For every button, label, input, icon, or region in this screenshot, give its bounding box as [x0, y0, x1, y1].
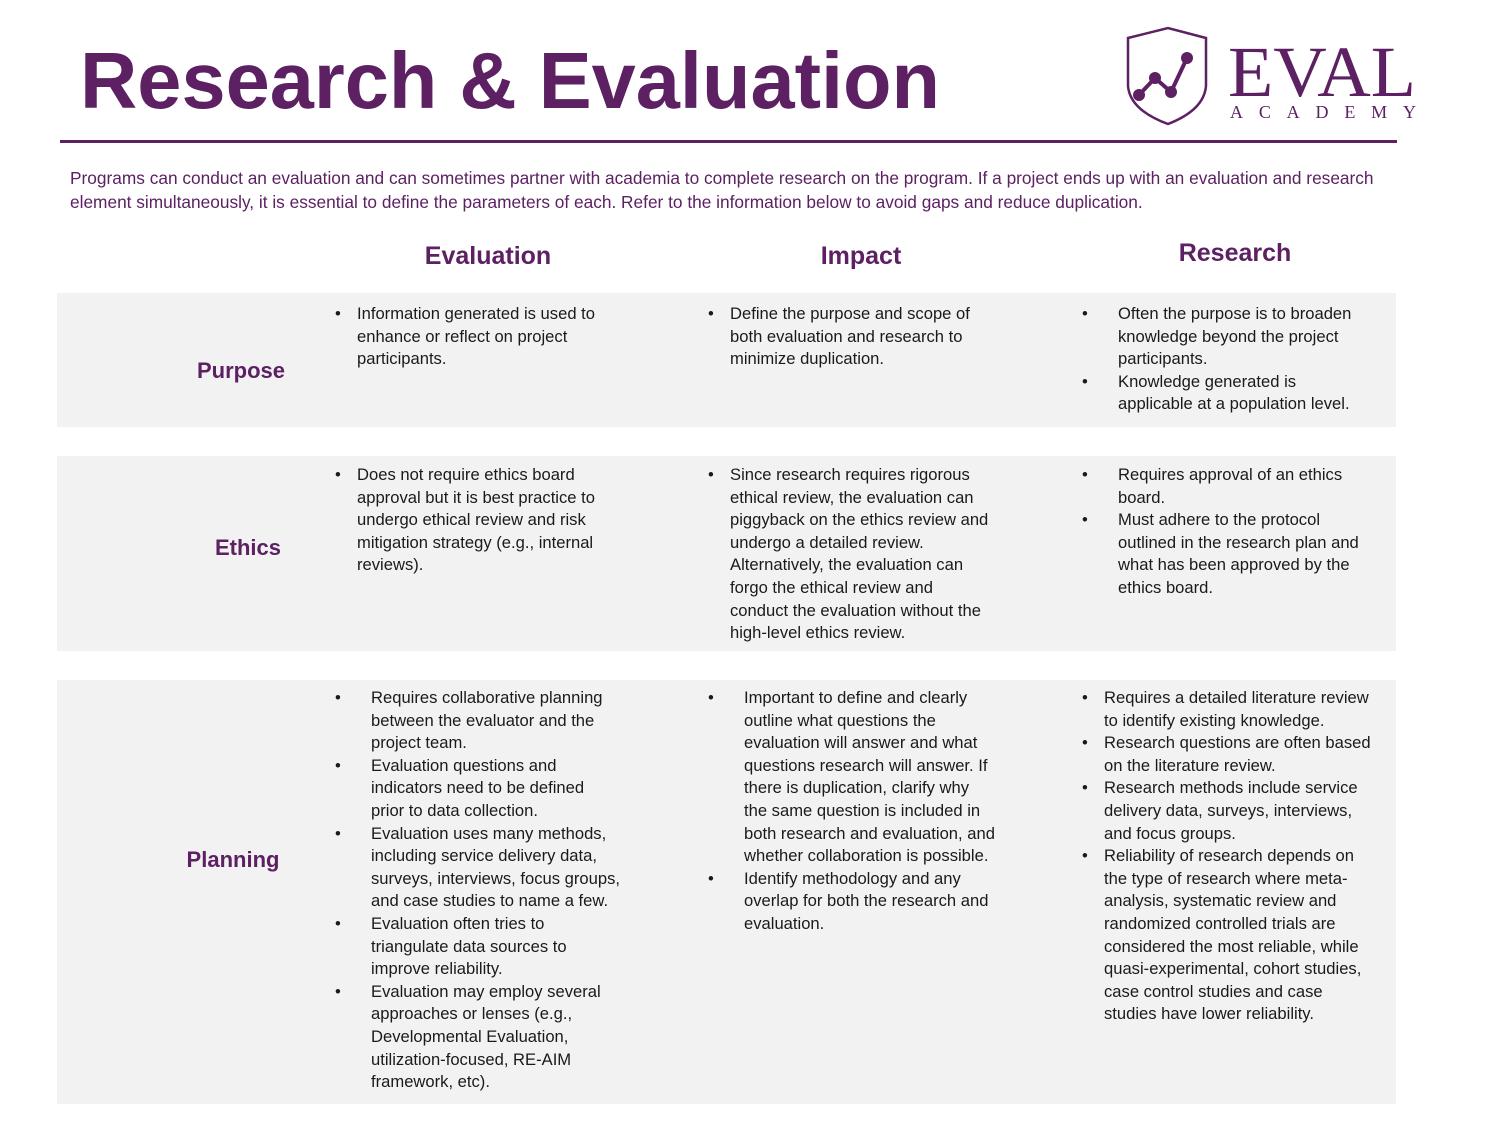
planning evaluation: surveys, interviews, focus groups, [371, 869, 620, 888]
planning evaluation: Developmental Evaluation, [371, 1027, 568, 1046]
ethics evaluation: approval but it is best practice to [357, 488, 595, 507]
panel: ethics [57, 456, 1396, 651]
ethics research: Must adhere to the protocol [1118, 510, 1320, 529]
planning evaluation: including service delivery data, [371, 846, 597, 865]
ethics evaluation: undergo ethical review and risk [357, 510, 586, 529]
planning impact: evaluation. [744, 914, 824, 933]
logo: EVAL [1228, 32, 1416, 112]
planning impact: whether collaboration is possible. [744, 846, 988, 865]
ethics impact: ethical review, the evaluation can [730, 488, 974, 507]
planning research: Research questions are often based [1104, 733, 1371, 752]
purpose research: Often the purpose is to broaden [1118, 304, 1351, 323]
header: Evaluation: Evaluation [425, 242, 551, 270]
planning evaluation: indicators need to be defined [371, 778, 584, 797]
planning research: Reliability of research depends on [1104, 846, 1354, 865]
purpose research: Knowledge generated is [1118, 372, 1296, 391]
ethics research: board. [1118, 488, 1165, 507]
planning impact: questions research will answer. If [744, 756, 988, 775]
planning evaluation: Evaluation questions and [371, 756, 556, 775]
planning research: on the literature review. [1104, 756, 1276, 775]
purpose research: knowledge beyond the project [1118, 327, 1338, 346]
planning research: randomized controlled trials are [1104, 914, 1336, 933]
planning evaluation: prior to data collection. [371, 801, 538, 820]
panel: purpose [57, 293, 1396, 427]
planning evaluation: utilization-focused, RE-AIM [371, 1050, 571, 1068]
ethics research: Requires approval of an ethics [1118, 465, 1342, 484]
planning research: to identify existing knowledge. [1104, 711, 1324, 730]
icon: shield [1128, 28, 1206, 124]
ethics evaluation: mitigation strategy (e.g., internal [357, 533, 593, 552]
purpose research: participants. [1118, 349, 1207, 368]
intro text: element simultaneously, it is essential to define the parameters of each. Refer to the information below to avoid gaps and reduce duplication. [70, 192, 1143, 212]
planning impact: Important to define and clearly [744, 688, 967, 707]
planning evaluation: framework, etc). [371, 1072, 490, 1091]
ethics impact: conduct the evaluation without the [730, 601, 981, 620]
planning evaluation: Requires collaborative planning [371, 688, 603, 707]
planning research: considered the most reliable, while [1104, 937, 1359, 956]
planning research: Requires a detailed literature review [1104, 688, 1369, 707]
planning research: quasi-experimental, cohort studies, [1104, 959, 1361, 978]
planning research: analysis, systematic review and [1104, 891, 1336, 910]
ethics evaluation: Does not require ethics board [357, 465, 575, 484]
label: Planning: Planning [187, 847, 279, 872]
ethics impact: high-level ethics review. [730, 623, 905, 642]
planning impact: evaluation will answer and what [744, 733, 977, 752]
ethics evaluation [336, 465, 595, 574]
header: Impact: Impact [821, 242, 901, 270]
planning research [1082, 688, 1371, 1023]
purpose evaluation: enhance or reflect on project [357, 327, 567, 346]
ethics impact: Since research requires rigorous [730, 465, 970, 484]
planning research: case control studies and case [1104, 982, 1323, 1001]
planning evaluation: approaches or lenses (e.g., [371, 1004, 572, 1023]
planning impact: Identify methodology and any [744, 869, 961, 888]
planning evaluation: Evaluation uses many methods, [371, 824, 606, 843]
ethics evaluation: reviews). [357, 555, 423, 574]
planning impact: both research and evaluation, and [744, 824, 995, 843]
planning research: and focus groups. [1104, 824, 1236, 843]
intro text: Programs can conduct an evaluation and can sometimes partner with academia to complete research on the program. If a project ends up with an evaluation and research [70, 168, 1374, 188]
purpose research [1082, 304, 1351, 413]
logo: ACADEMY [1230, 102, 1416, 122]
ethics impact: undergo a detailed review. [730, 533, 924, 552]
planning impact: there is duplication, clarify why [744, 778, 969, 797]
purpose evaluation: Information generated is used to [357, 304, 595, 323]
ethics impact [708, 465, 988, 642]
label: Purpose: Purpose [197, 358, 285, 383]
ethics research: what has been approved by the [1118, 555, 1350, 574]
planning evaluation: Evaluation may employ several [371, 982, 601, 1001]
planning research: studies have lower reliability. [1104, 1004, 1314, 1023]
planning evaluation: Evaluation often tries to [371, 914, 544, 933]
planning impact [708, 688, 995, 933]
planning impact: overlap for both the research and [744, 891, 988, 910]
ethics research [1082, 465, 1359, 597]
planning evaluation: project team. [371, 733, 467, 752]
purpose research: applicable at a population level. [1118, 394, 1350, 413]
planning evaluation: improve reliability. [371, 959, 503, 978]
ethics research: ethics board. [1118, 578, 1213, 597]
planning evaluation: between the evaluator and the [371, 711, 594, 730]
intro text [70, 168, 1374, 212]
ethics impact: forgo the ethical review and [730, 578, 933, 597]
logo [1126, 26, 1416, 126]
title: Research & Evaluation [80, 36, 940, 125]
purpose impact: minimize duplication. [730, 349, 884, 368]
header: Research: Research [1179, 239, 1291, 267]
planning evaluation: triangulate data sources to [371, 937, 567, 956]
purpose impact: Define the purpose and scope of [730, 304, 970, 323]
panel: planning [57, 680, 1396, 1104]
planning impact: outline what questions the [744, 711, 936, 730]
purpose impact: both evaluation and research to [730, 327, 962, 346]
ethics research: outlined in the research plan and [1118, 533, 1359, 552]
planning research: delivery data, surveys, interviews, [1104, 801, 1352, 820]
planning research: Research methods include service [1104, 778, 1358, 797]
purpose evaluation [336, 304, 595, 368]
label: Ethics: Ethics [215, 535, 281, 560]
purpose evaluation: participants. [357, 349, 446, 368]
planning research: the type of research where meta- [1104, 869, 1348, 888]
ethics impact: piggyback on the ethics review and [730, 510, 988, 529]
ethics impact: Alternatively, the evaluation can [730, 555, 963, 574]
planning impact: the same question is included in [744, 801, 980, 820]
purpose impact [708, 304, 970, 368]
planning evaluation: and case studies to name a few. [371, 891, 608, 910]
planning evaluation [336, 688, 620, 1091]
